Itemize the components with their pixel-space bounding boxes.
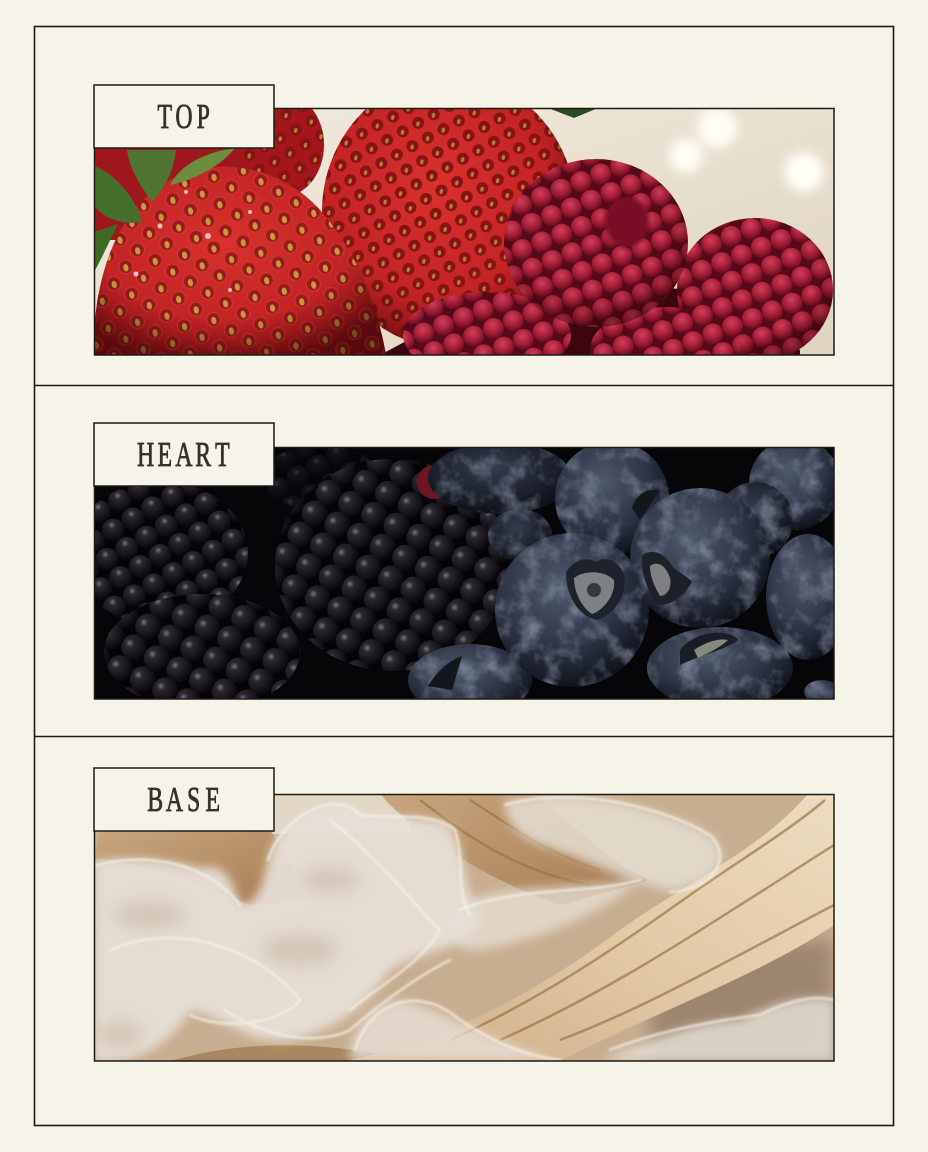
photo border (94, 108, 834, 355)
photo border (94, 794, 834, 1061)
photo: blackberries and blueberries (95, 448, 834, 698)
photo border (94, 448, 834, 699)
label: TOP: TOP (158, 98, 210, 136)
photo: strawberries and raspberries (95, 109, 834, 354)
label: HEART: HEART (137, 436, 230, 474)
panel: base (94, 768, 834, 1061)
label: TOP (94, 85, 274, 148)
label: BASE: BASE (147, 781, 220, 819)
label: HEART (94, 423, 274, 486)
panel: heart (72, 423, 850, 716)
label: BASE (94, 768, 274, 831)
photo: wood and smoke (94, 794, 834, 1061)
panel: top (93, 84, 835, 356)
